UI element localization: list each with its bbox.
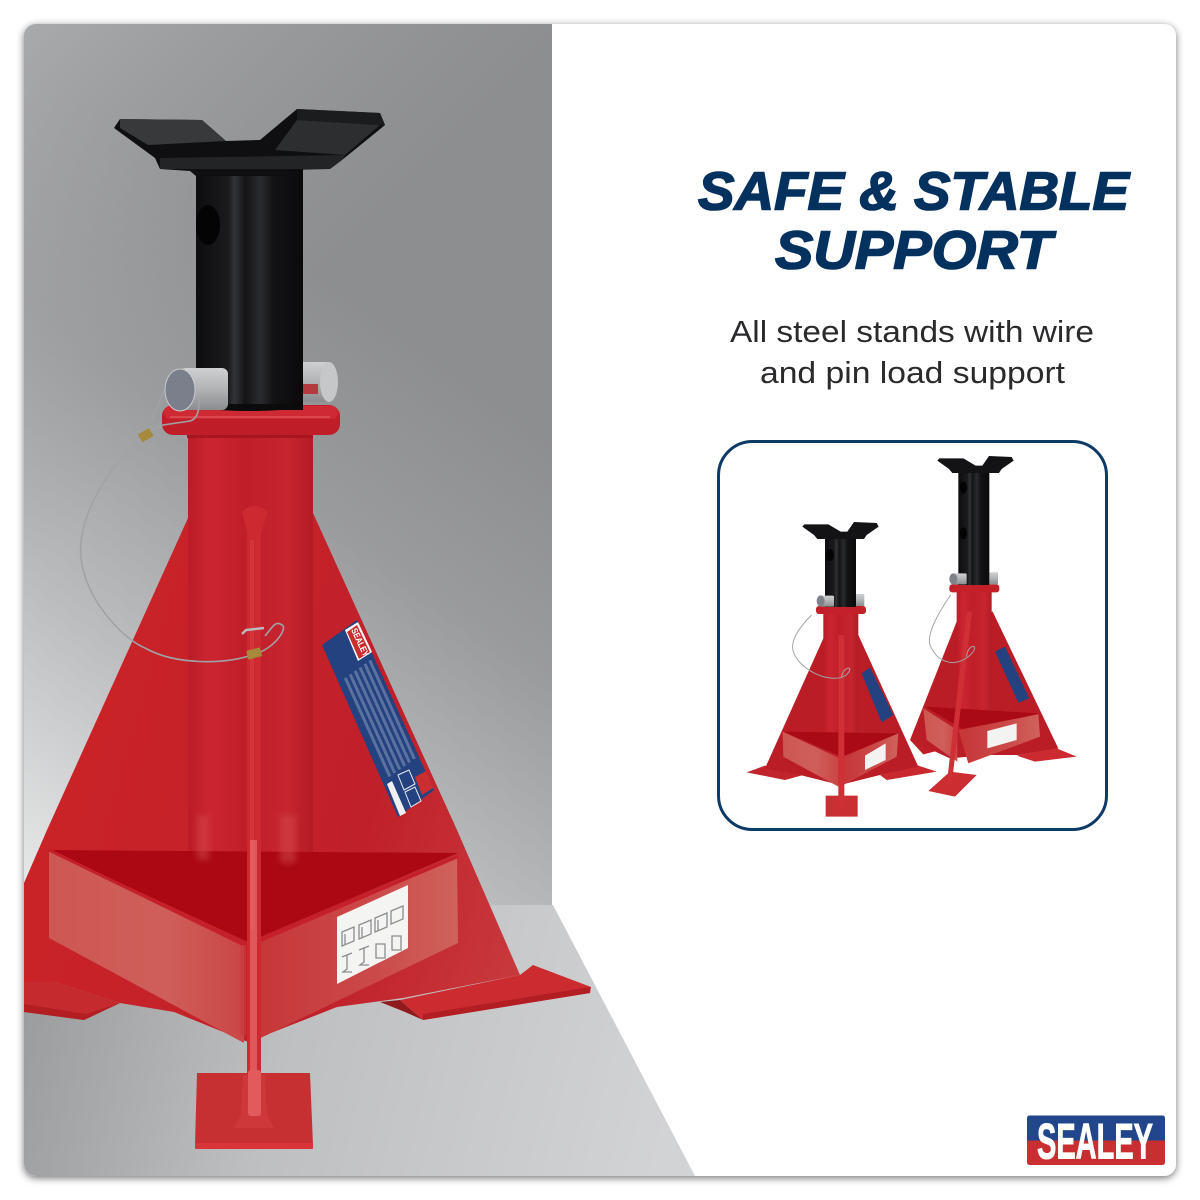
stand rear [910,456,1077,797]
heading: SUPPORT [775,220,1056,280]
blue warning label: SEALEY [349,627,371,658]
description text [730,314,1094,390]
heading: SAFE & STABLE [698,162,1131,222]
instruction sticker [337,885,408,984]
retaining wire [81,390,283,662]
black upper tube [196,168,303,411]
tray lip [49,850,457,945]
stand front [747,522,937,817]
left foot [24,982,120,1020]
red flange [162,405,340,438]
description text: All steel stands with wire [730,314,1094,349]
right foot [380,965,591,1020]
inner tray shadow [49,850,458,942]
tray panel right [250,857,458,1043]
description text: and pin load support [760,355,1065,390]
inset panel: pair of stands [718,442,1106,830]
heading [698,162,1131,280]
large axle stand photo [24,109,591,1149]
red tube [188,430,313,870]
tray panel left [49,850,244,1043]
triangular gusset plate [24,513,520,1042]
left pin [165,368,228,411]
saddle head [114,109,385,176]
rod [240,506,268,1110]
right pin [303,362,338,402]
foot pad [195,1070,313,1149]
blue warning label [322,620,434,817]
panel: photo background [24,24,695,1176]
